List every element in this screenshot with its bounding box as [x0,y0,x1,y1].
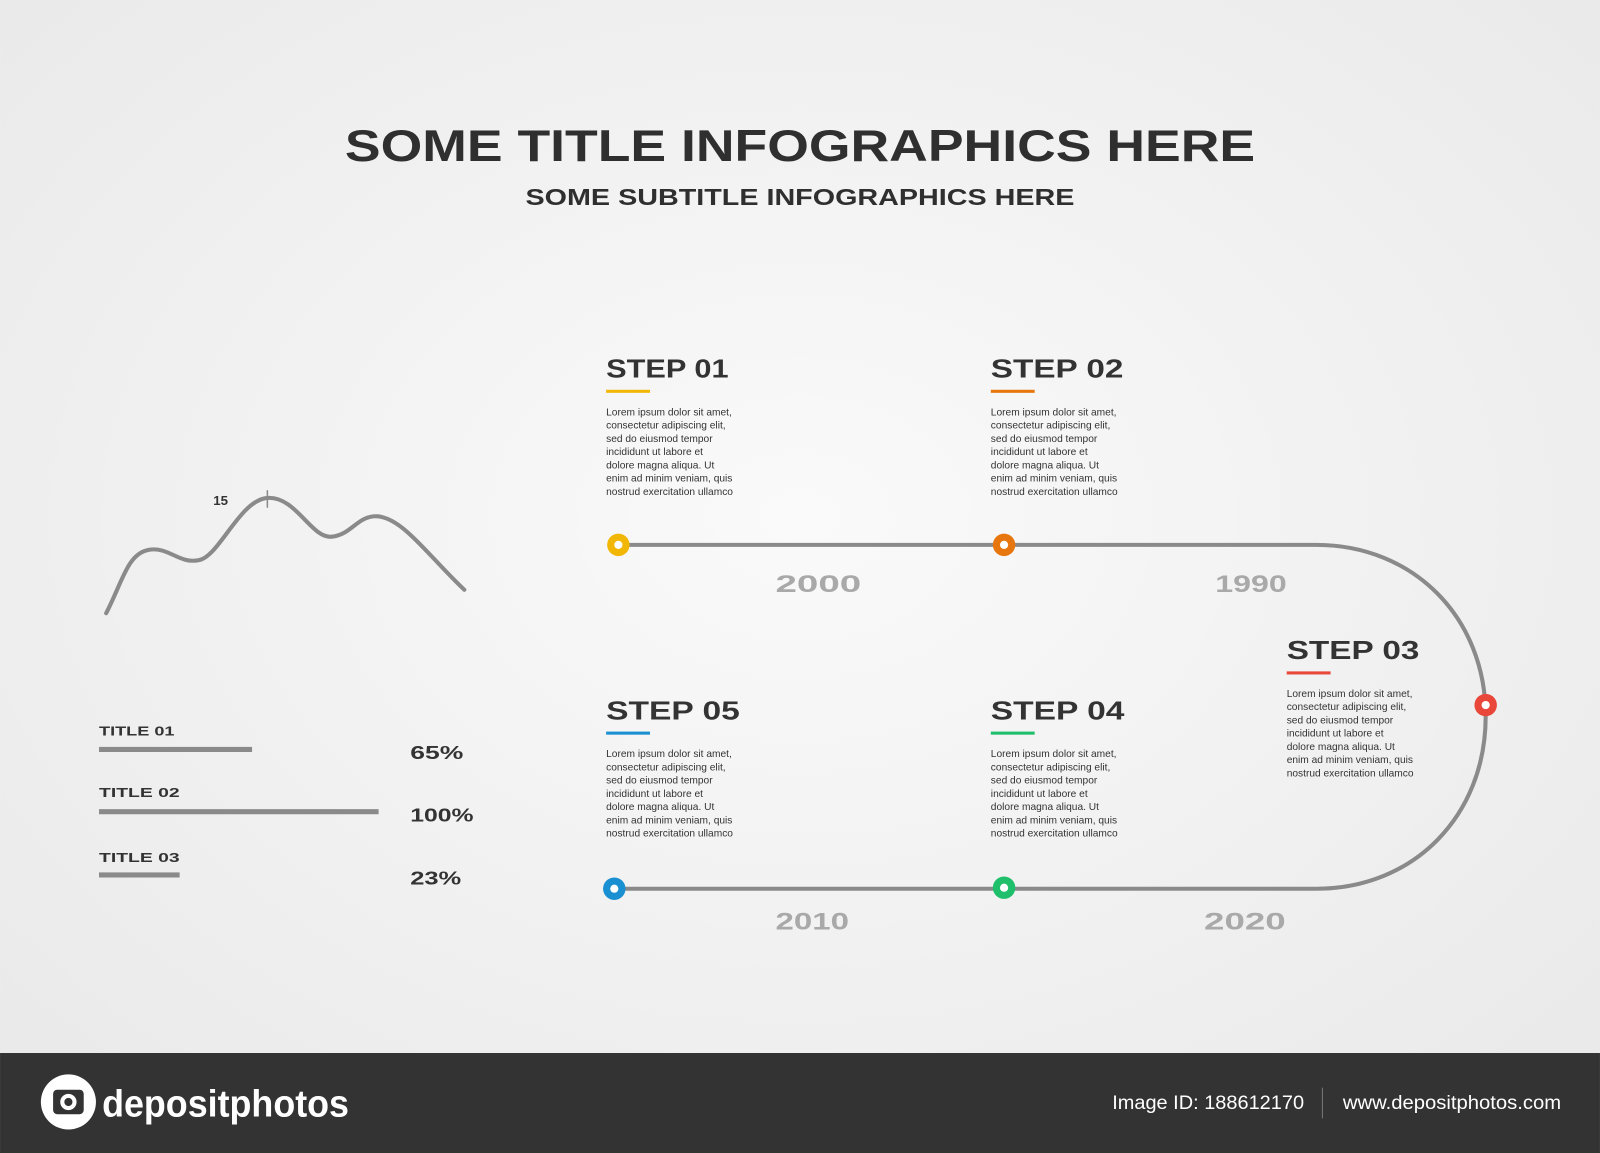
step 04 [991,697,1126,840]
subtitle: SOME SUBTITLE INFOGRAPHICS HERE [526,184,1074,210]
progress bars: TITLE 03 [99,850,180,865]
step 03: nostrud exercitation ullamco [1287,768,1414,779]
step 04: nostrud exercitation ullamco [991,829,1118,840]
step 01: STEP 01 [606,356,729,384]
step 02: incididunt ut labore et [991,447,1088,458]
step 04: consectetur adipiscing elit, [991,762,1110,773]
years [776,571,1287,936]
step 05: sed do eiusmod tempor [606,776,713,787]
step 01: Lorem ipsum dolor sit amet, [606,407,732,418]
footer: www.depositphotos.com [1342,1092,1561,1114]
step 03 [1287,637,1419,779]
step 02: enim ad minim veniam, quis [991,474,1117,485]
step 04: sed do eiusmod tempor [991,776,1098,787]
step 01: incididunt ut labore et [606,447,703,458]
years: 2000 [776,571,861,598]
progress bars: TITLE 02 [99,785,180,800]
progress bars [99,724,473,889]
icon: logo camera [41,1074,96,1130]
step 01: dolore magna aliqua. Ut [606,460,714,471]
markers [603,534,1497,900]
step 04: enim ad minim veniam, quis [991,815,1117,826]
step 03: sed do eiusmod tempor [1287,715,1394,726]
step 01: sed do eiusmod tempor [606,434,713,445]
step 01: consectetur adipiscing elit, [606,421,726,432]
years: 2010 [776,909,849,936]
step 03: enim ad minim veniam, quis [1287,755,1413,766]
step 02: dolore magna aliqua. Ut [991,460,1099,471]
timeline path [614,545,1486,889]
step 02 [991,356,1123,498]
step 05: consectetur adipiscing elit, [606,762,726,773]
progress bars: TITLE 01 [99,724,175,739]
progress bars: 23% [410,868,461,889]
step 03: STEP 03 [1287,637,1419,665]
step 02: consectetur adipiscing elit, [991,421,1110,432]
step 02: sed do eiusmod tempor [991,434,1098,445]
chart label: 15 [213,493,228,508]
step 04: incididunt ut labore et [991,789,1088,800]
step 05 [606,697,740,840]
step 05: dolore magna aliqua. Ut [606,802,714,813]
step 05: incididunt ut labore et [606,789,703,800]
title: SOME TITLE INFOGRAPHICS HERE [345,120,1255,171]
progress bars: 65% [410,742,463,763]
step 04: dolore magna aliqua. Ut [991,802,1099,813]
step 01: enim ad minim veniam, quis [606,474,732,485]
footer: Image ID: 188612170 [1112,1092,1304,1114]
step 02: nostrud exercitation ullamco [991,487,1118,498]
years: 2020 [1204,909,1286,936]
step 01: nostrud exercitation ullamco [606,487,733,498]
step 04: Lorem ipsum dolor sit amet, [991,749,1117,760]
step 03: incididunt ut labore et [1287,729,1384,740]
step 05: enim ad minim veniam, quis [606,815,732,826]
footer: depositphotos [102,1082,349,1124]
step 04: STEP 04 [991,697,1126,725]
step 05: STEP 05 [606,697,740,725]
step 03: Lorem ipsum dolor sit amet, [1287,689,1412,700]
step 02: Lorem ipsum dolor sit amet, [991,407,1117,418]
step 05: nostrud exercitation ullamco [606,829,733,840]
step 03: consectetur adipiscing elit, [1287,702,1406,713]
footer [0,1053,1600,1153]
step 05: Lorem ipsum dolor sit amet, [606,749,732,760]
progress bars: 100% [410,804,473,825]
years: 1990 [1215,571,1287,598]
step 01 [606,356,733,498]
line chart [106,491,464,613]
step 02: STEP 02 [991,356,1123,384]
step 03: dolore magna aliqua. Ut [1287,742,1395,753]
